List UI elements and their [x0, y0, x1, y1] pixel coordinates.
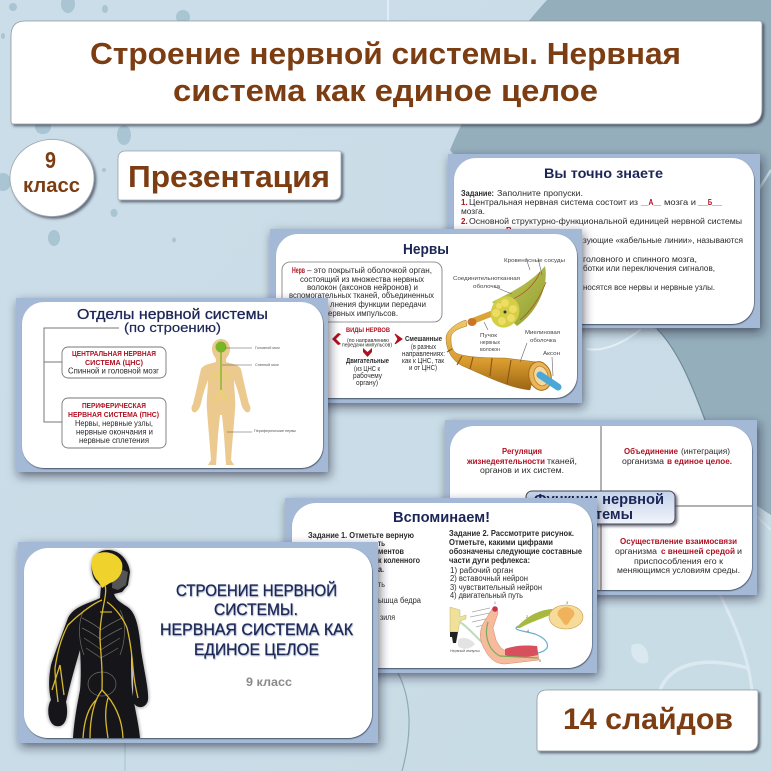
task 1	[308, 531, 422, 622]
exercise text: __А__	[640, 198, 661, 207]
nerve types: как к ЦНС, так	[402, 358, 445, 365]
grade badge: класс	[23, 175, 80, 197]
heading: Отделы нервной системы	[77, 306, 268, 323]
definition box: состоящий из множества нервных	[300, 275, 424, 284]
definition box: Нерв	[292, 266, 305, 275]
panel: slide you know	[448, 154, 760, 328]
task 1: зиля	[380, 613, 395, 622]
task 2: обозначены следующие составные	[449, 547, 583, 556]
exercise text: зующие «кабельные линии», называются	[583, 236, 743, 245]
box: PNS: Нервы, нервные узлы,	[75, 419, 153, 428]
human body diagram	[192, 339, 297, 465]
reflex arc illustration: 2	[526, 615, 528, 619]
grade badge	[10, 140, 94, 216]
box: CNS: СИСТЕМА (ЦНС)	[85, 360, 143, 367]
definition box: волокон (аксонов нейронов) и	[307, 283, 418, 292]
nerve types: Двигательные	[346, 358, 389, 365]
function: environment: меняющимся условиям среды.	[617, 566, 740, 575]
nerve types: (по направлению	[347, 338, 389, 344]
function: regulation: Регуляция	[502, 447, 542, 456]
label: slide count: 14 слайдов	[563, 703, 733, 736]
box: CNS: Спинной и головной мозг	[68, 366, 159, 376]
exercise text: мозга.	[461, 207, 485, 216]
exercise text: 1.	[461, 198, 468, 207]
nerve types: (в разных	[411, 344, 436, 351]
cover heading	[160, 581, 353, 659]
function: integration: в единое целое.	[667, 457, 732, 466]
box: CNS: ЦЕНТРАЛЬНАЯ НЕРВНАЯ	[72, 351, 156, 358]
task 2: 1) рабочий орган	[450, 566, 513, 575]
function: regulation	[466, 447, 577, 475]
box: PNS: НЕРВНАЯ СИСТЕМА (ПНС)	[68, 412, 159, 419]
function: integration: Объединение	[624, 447, 679, 456]
nerve types: направлениях:	[402, 351, 445, 358]
cover heading: НЕРВНАЯ СИСТЕМА КАК	[160, 620, 353, 639]
task 1: ментов	[378, 547, 404, 556]
human body diagram: Спинной мозг	[255, 363, 280, 367]
reflex arc illustration: Нервный импульс	[450, 649, 480, 653]
definition box	[282, 262, 442, 322]
reflex arc illustration: 1	[494, 601, 496, 605]
function: environment: Осуществление взаимосвязи	[620, 537, 737, 546]
heading: Вспоминаем!	[393, 509, 490, 526]
heading: Нервы	[403, 241, 449, 258]
box: PNS: нервные окончания и	[76, 428, 153, 436]
task 2: части дуги рефлекса:	[449, 556, 530, 565]
label: presentation	[118, 151, 341, 200]
heading: Вы точно знаете	[544, 165, 663, 181]
title line 1: Строение нервной системы. Нервная	[90, 36, 681, 71]
nerve illustration: оболочка	[530, 338, 557, 344]
task 1: ть	[378, 580, 385, 589]
exercise text: Заполните пропуски.	[497, 189, 583, 198]
function: environment: и	[737, 547, 742, 556]
nerve illustration	[446, 258, 565, 393]
exercise text: В	[506, 226, 512, 235]
panel: slide divisions	[16, 298, 328, 472]
function: integration: (интеграция)	[681, 447, 730, 456]
function: environment: организма	[615, 547, 658, 556]
exercise text: ботки или переключения сигналов,	[583, 264, 715, 273]
definition box: – это покрытый оболочкой орган,	[307, 266, 432, 275]
nerve illustration: Пучок	[480, 333, 498, 339]
exercise text: Задание:	[461, 189, 494, 198]
nerve types: рабочему	[353, 372, 382, 380]
subheading: (по строению)	[124, 320, 221, 335]
nervous system figure	[48, 550, 148, 738]
nerve illustration: Аксон	[543, 351, 560, 357]
box: PNS: нервные сплетения	[79, 436, 149, 445]
nerve types: органу)	[356, 380, 378, 387]
reflex arc illustration	[450, 601, 583, 664]
cover heading: СТРОЕНИЕ НЕРВНОЙ	[176, 581, 337, 600]
nerve types: (из ЦНС к	[354, 366, 381, 373]
nerve types: ВИДЫ НЕРВОВ	[346, 327, 390, 334]
function: environment	[615, 537, 742, 575]
exercise text: головного и спинного мозга,	[583, 255, 697, 264]
panel: slide nerves	[270, 229, 582, 403]
nerve illustration: Миелиновая	[525, 330, 560, 336]
task 2: Отметьте, какими цифрами	[449, 538, 553, 547]
exercise text: Основной структурно-функциональной единицей нервной системы	[469, 217, 742, 226]
panel: slide recall	[285, 498, 597, 673]
cover grade label: 9 класс	[246, 675, 292, 689]
reflex arc illustration: 3	[566, 601, 568, 605]
panel: slide cover	[18, 542, 378, 743]
function: integration	[622, 447, 732, 466]
exercise text: носятся все нервы и нервные узлы.	[583, 283, 715, 292]
nerve illustration: оболочка	[473, 284, 501, 290]
definition box: ервных импульсов.	[328, 309, 398, 318]
nerve illustration: Соединительнотканная	[453, 276, 520, 282]
task 1: ышца бедра	[378, 596, 422, 605]
task 2: 4) двигательный путь	[450, 591, 523, 600]
box: PNS: ПЕРИФЕРИЧЕСКАЯ	[82, 403, 146, 410]
function: environment: приспособления его к	[634, 557, 724, 566]
exercise text: ___Б___	[697, 198, 722, 207]
function: regulation: органов и их систем.	[480, 466, 564, 475]
exercise text: 2.	[461, 217, 468, 226]
human body diagram: Периферические нервы	[254, 429, 297, 433]
nerve types	[332, 327, 445, 387]
nerve types: Смешанные	[405, 336, 442, 343]
function: regulation: жизнедеятельности	[466, 457, 545, 466]
nerve types: передачи импульсов)	[342, 342, 392, 348]
task 2: 3) чувствительный нейрон	[450, 583, 542, 592]
nerve types: и от ЦНС)	[409, 365, 437, 372]
task 1: ть	[378, 539, 385, 548]
cover heading: СИСТЕМЫ.	[214, 600, 298, 619]
exercise text: Центральная нервная система состоит из	[469, 198, 638, 207]
function: regulation: тканей,	[547, 457, 577, 466]
definition box: вспомогательных тканей, объединенных	[289, 291, 434, 300]
task 1: а.	[378, 565, 384, 574]
reflex arc illustration: 5	[539, 659, 541, 663]
task 1: к коленного	[378, 556, 420, 565]
box: PNS	[62, 398, 166, 448]
central title box	[526, 491, 675, 524]
grade badge: 9	[45, 147, 56, 173]
function: environment: с внешней средой	[661, 547, 735, 556]
label: slide count	[537, 690, 758, 751]
function: integration: организма	[622, 457, 665, 466]
central title box: Функции нервной	[534, 491, 664, 508]
nerve illustration: нервных	[480, 340, 500, 346]
exercise text	[461, 189, 743, 292]
task 2: Задание 2. Рассмотрите рисунок.	[449, 529, 574, 538]
definition box: лнения функции передачи	[330, 300, 426, 309]
label: presentation: Презентация	[128, 159, 330, 194]
exercise text: мозга и	[664, 198, 696, 207]
title panel	[11, 21, 762, 124]
box: CNS	[62, 347, 166, 378]
nerve illustration: Кровеносные сосуды	[504, 258, 565, 264]
task 2: 2) вставочный нейрон	[450, 574, 528, 583]
nerve illustration: волокон	[480, 347, 500, 353]
human body diagram: Головной мозг	[255, 346, 281, 350]
task 1: Задание 1. Отметьте верную	[308, 531, 414, 540]
title line 2: система как единое целое	[173, 73, 598, 108]
connector	[44, 328, 119, 422]
central title box: системы	[570, 506, 633, 523]
cover heading: ЕДИНОЕ ЦЕЛОЕ	[194, 640, 319, 659]
task 2	[449, 529, 583, 600]
panel: slide functions	[445, 420, 757, 595]
reflex arc illustration: 4	[527, 629, 529, 633]
